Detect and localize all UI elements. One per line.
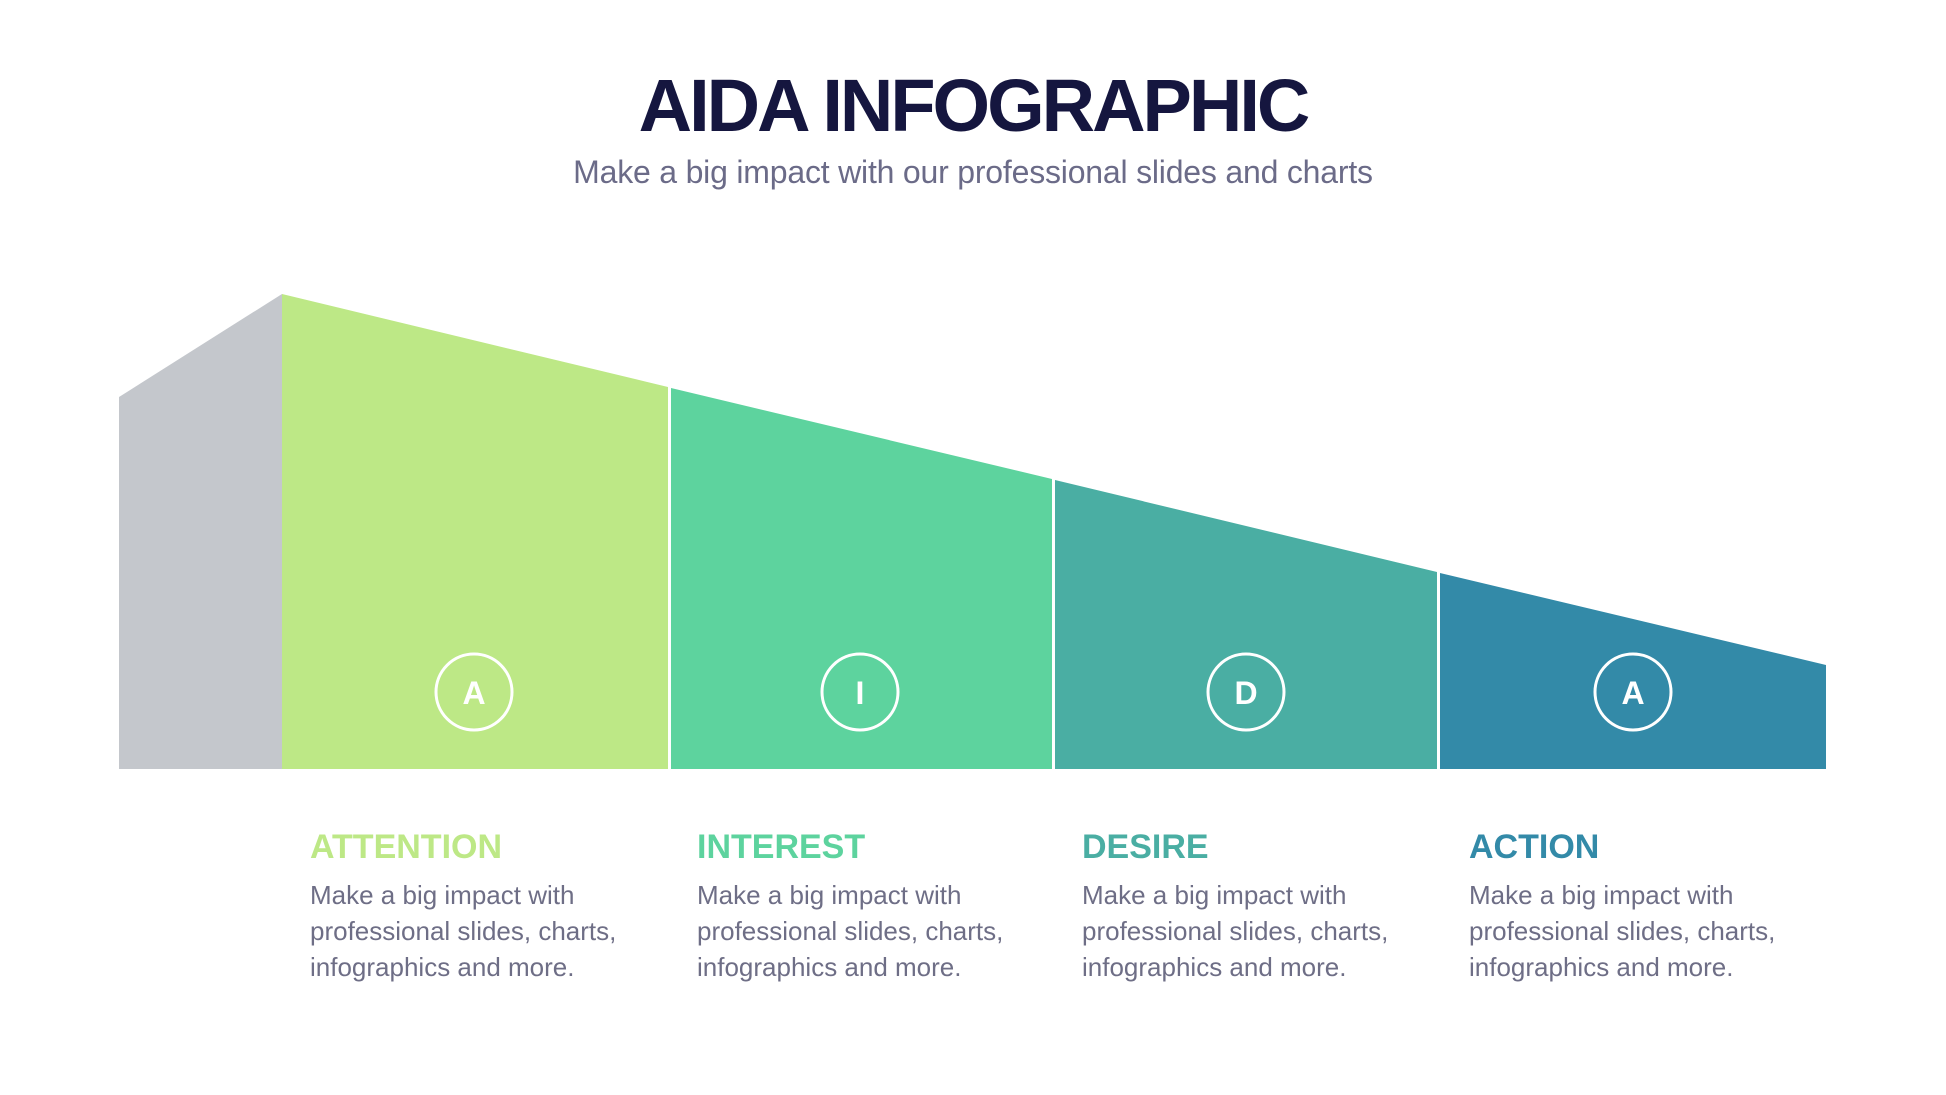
text block: interest: professional slides, charts, (697, 916, 1003, 946)
text block: attention: infographics and more. (310, 952, 574, 982)
text block: desire: Make a big impact with (1082, 880, 1346, 910)
text block: action: Make a big impact with (1469, 880, 1733, 910)
text block: action: ACTION (1469, 828, 1599, 866)
segment: desire (1055, 480, 1437, 769)
segment: attention (282, 294, 668, 769)
text block: desire: professional slides, charts, (1082, 916, 1388, 946)
text block: desire (1082, 828, 1388, 982)
title: AIDA INFOGRAPHIC (639, 64, 1307, 147)
segment: interest: I (856, 675, 864, 711)
text block: interest: infographics and more. (697, 952, 961, 982)
segment: attention: A (462, 675, 486, 711)
text block: action: professional slides, charts, (1469, 916, 1775, 946)
segment: desire: D (1234, 675, 1258, 711)
segment: interest (671, 388, 1052, 769)
text block: action: infographics and more. (1469, 952, 1733, 982)
subtitle: Make a big impact with our professional slides and charts (573, 154, 1373, 190)
text block: attention (310, 828, 616, 982)
side face (gray) (119, 294, 282, 769)
text block: attention: ATTENTION (310, 828, 502, 866)
segment: action (1440, 573, 1826, 769)
text block: attention: professional slides, charts, (310, 916, 616, 946)
text block: desire: DESIRE (1082, 828, 1209, 866)
segment: action: A (1621, 675, 1645, 711)
text block: interest (697, 828, 1003, 982)
text block: attention: Make a big impact with (310, 880, 574, 910)
text block: desire: infographics and more. (1082, 952, 1346, 982)
text block: interest: Make a big impact with (697, 880, 961, 910)
text block: interest: INTEREST (697, 828, 865, 866)
text block: action (1469, 828, 1775, 982)
